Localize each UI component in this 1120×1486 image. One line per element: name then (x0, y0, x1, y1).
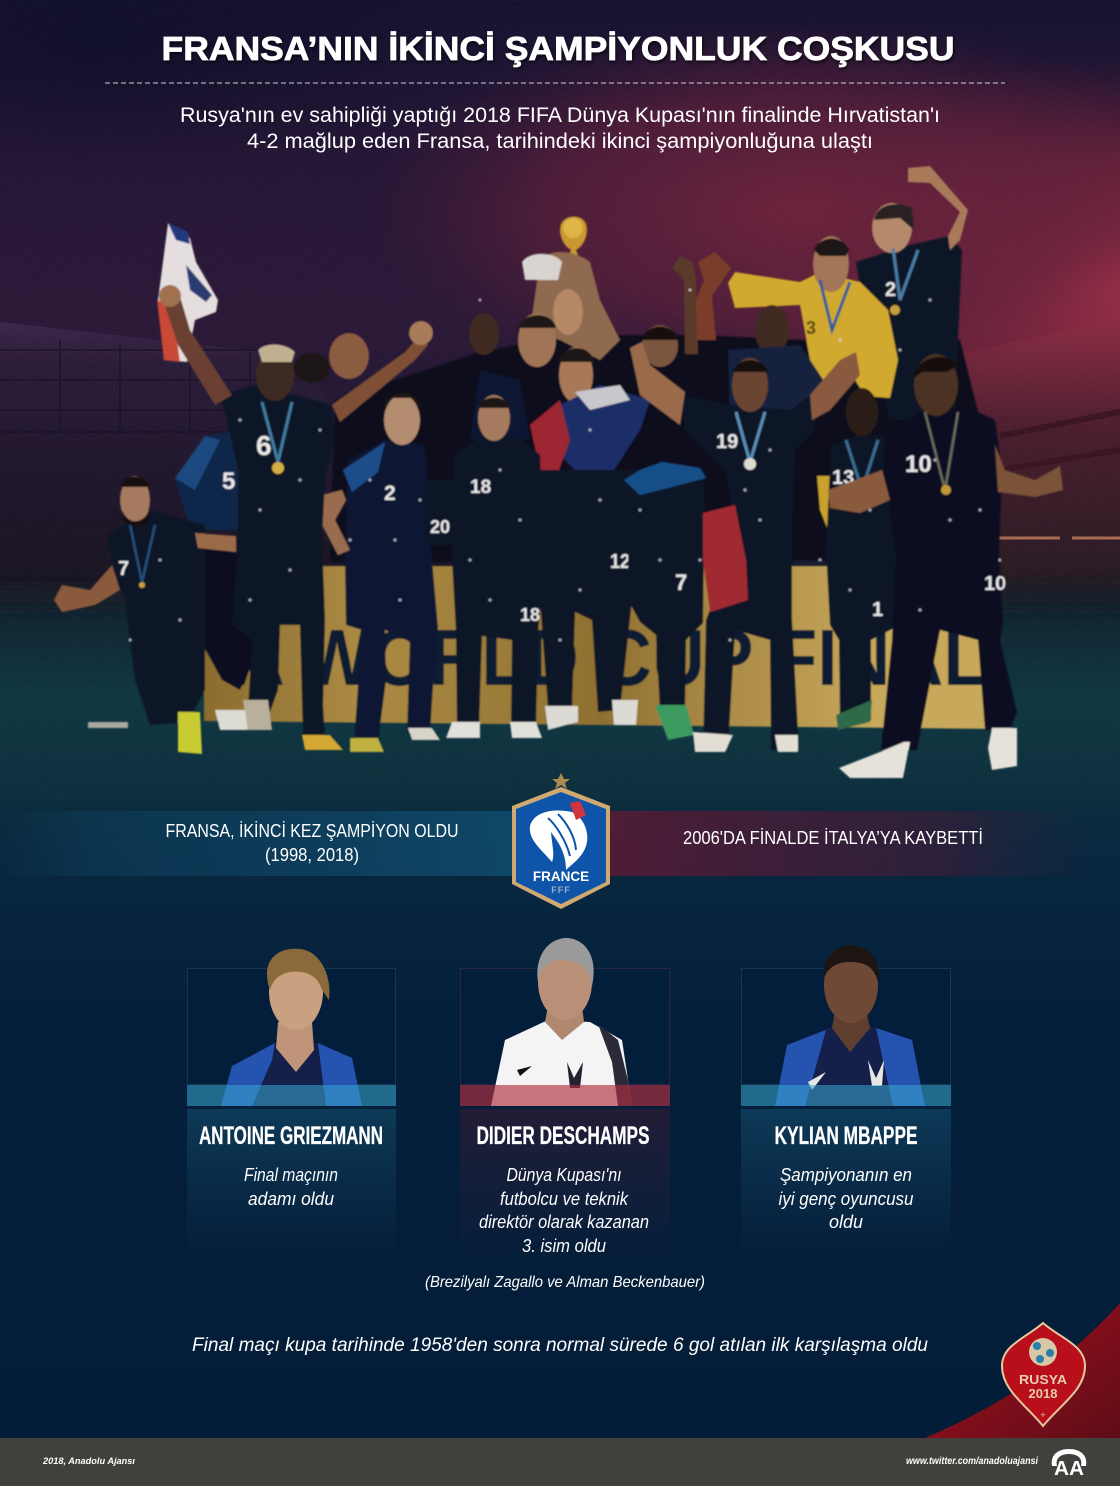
card: Deschamps: 3. isim oldu (522, 1236, 606, 1256)
player 10: 10 (905, 451, 932, 478)
card: Deschamps: futbolcu ve teknik (500, 1189, 629, 1209)
subtitle (180, 104, 940, 153)
note: Zagallo and Beckenbauer: (Brezilyalı Zagallo ve Alman Beckenbauer) (425, 1274, 705, 1291)
card: Mbappe: oldu (829, 1212, 863, 1232)
emblem: Rusya 2018: RUSYA (1019, 1372, 1068, 1387)
footer (0, 1438, 1120, 1486)
footer: 2018, Anadolu Ajansı (42, 1456, 135, 1467)
player 2: 2 (384, 482, 396, 505)
confetti (128, 288, 1002, 642)
card: Griezmann: adamı oldu (248, 1189, 334, 1209)
portrait (491, 938, 632, 1106)
icon: AA logo (1052, 1449, 1086, 1480)
player 10: 10 (984, 573, 1006, 595)
player 13: 1 (872, 599, 883, 621)
card: Griezmann: Final maçının (244, 1165, 338, 1185)
card: Deschamps: Dünya Kupası'nı (506, 1165, 622, 1185)
goalkeeper: 3 (806, 318, 816, 338)
player 19: 19 (716, 431, 738, 453)
player 18: 18 (520, 605, 540, 625)
card: Mbappe (741, 945, 951, 1259)
card: Deschamps: direktör olarak kazanan (479, 1212, 649, 1232)
player 12: 12 (610, 551, 630, 573)
player 7 (624, 462, 706, 740)
badge: France FFF: FFF (551, 885, 571, 895)
player 10 (828, 354, 1063, 778)
gold banner (204, 566, 998, 729)
band: right (606, 811, 1086, 876)
trophy (560, 216, 587, 262)
player 13: 13 (832, 467, 854, 489)
player 7 kneeling: 7 (118, 558, 129, 580)
card: Mbappe: KYLIAN MBAPPE (774, 1122, 918, 1150)
final match note: Final maçı kupa tarihinde 1958'den sonra normal sürede 6 gol atılan ilk karşılaşma oldu (192, 1335, 928, 1356)
band: left (0, 811, 515, 876)
portrait (775, 945, 925, 1106)
player 6: 6 (256, 430, 272, 461)
card: Griezmann: ANTOINE GRIEZMANN (199, 1122, 383, 1150)
player 7: 7 (675, 570, 687, 595)
emblem: Rusya 2018: + (1040, 1410, 1046, 1420)
player 18: 18 (470, 477, 491, 498)
player behind left (196, 540, 262, 690)
player 20: 20 (430, 517, 450, 537)
gold banner: A WORLD CUP FINAL (232, 613, 988, 702)
footer: www.twitter.com/anadoluajansi (906, 1456, 1038, 1467)
top right player (856, 166, 968, 420)
card: Griezmann (187, 949, 396, 1259)
band: left: FRANSA, İKİNCİ KEZ ŞAMPİYON OLDU (166, 821, 458, 841)
top right player: 2 (885, 279, 896, 301)
icon: AA logo: AA (1054, 1458, 1084, 1480)
back row mass (330, 335, 985, 562)
player 7 kneeling (54, 476, 236, 754)
band: left: (1998, 2018) (265, 845, 359, 865)
player 18 (446, 395, 545, 738)
subtitle: Rusya'nın ev sahipliği yaptığı 2018 FIFA Dünya Kupası'nın finalinde Hırvatistan'ı (180, 104, 940, 127)
player 2 (322, 393, 440, 752)
card: Mbappe: iyi genç oyuncusu (778, 1189, 914, 1209)
subtitle: 4-2 mağlup eden Fransa, tarihindeki ikinci şampiyonluğuna ulaştı (247, 130, 873, 153)
player 5 (175, 432, 245, 530)
player 6 (159, 285, 433, 750)
flag (157, 223, 218, 362)
badge: France FFF (512, 773, 610, 909)
card: Deschamps (460, 938, 670, 1259)
player 12 (540, 470, 640, 730)
emblem: Rusya 2018 (1002, 1323, 1085, 1426)
badge: France FFF: FRANCE (533, 869, 589, 884)
portrait (221, 949, 362, 1106)
emblem: Rusya 2018: 2018 (1029, 1386, 1057, 1401)
player 13 (826, 388, 905, 730)
player 20 (425, 480, 455, 545)
band: right: 2006'DA FİNALDE İTALYA’YA KAYBETTİ (683, 828, 983, 848)
card: Deschamps: DIDIER DESCHAMPS (476, 1122, 650, 1150)
card: Mbappe: Şampiyonanın en (780, 1165, 912, 1185)
player 5: 5 (222, 468, 235, 495)
red corner swoosh (925, 1303, 1120, 1438)
player 19 (630, 342, 860, 752)
goalkeeper (728, 236, 898, 540)
title: FRANSA’NIN İKİNCİ ŞAMPİYONLUK COŞKUSU (162, 30, 955, 67)
center group (294, 216, 830, 478)
team photo (54, 166, 1063, 778)
